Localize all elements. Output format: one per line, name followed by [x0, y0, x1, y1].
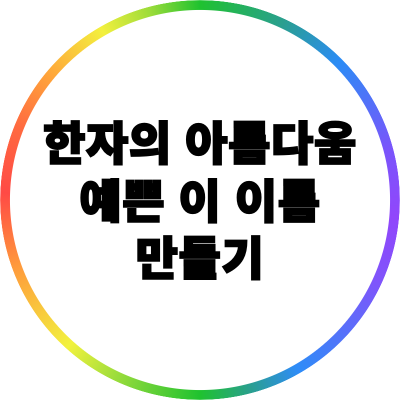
title line 3: 만들기 — [136, 233, 264, 285]
title line 1: 한자의 아름다움 — [43, 118, 357, 170]
title line 2: 예쁜 이 이름 — [79, 176, 321, 228]
